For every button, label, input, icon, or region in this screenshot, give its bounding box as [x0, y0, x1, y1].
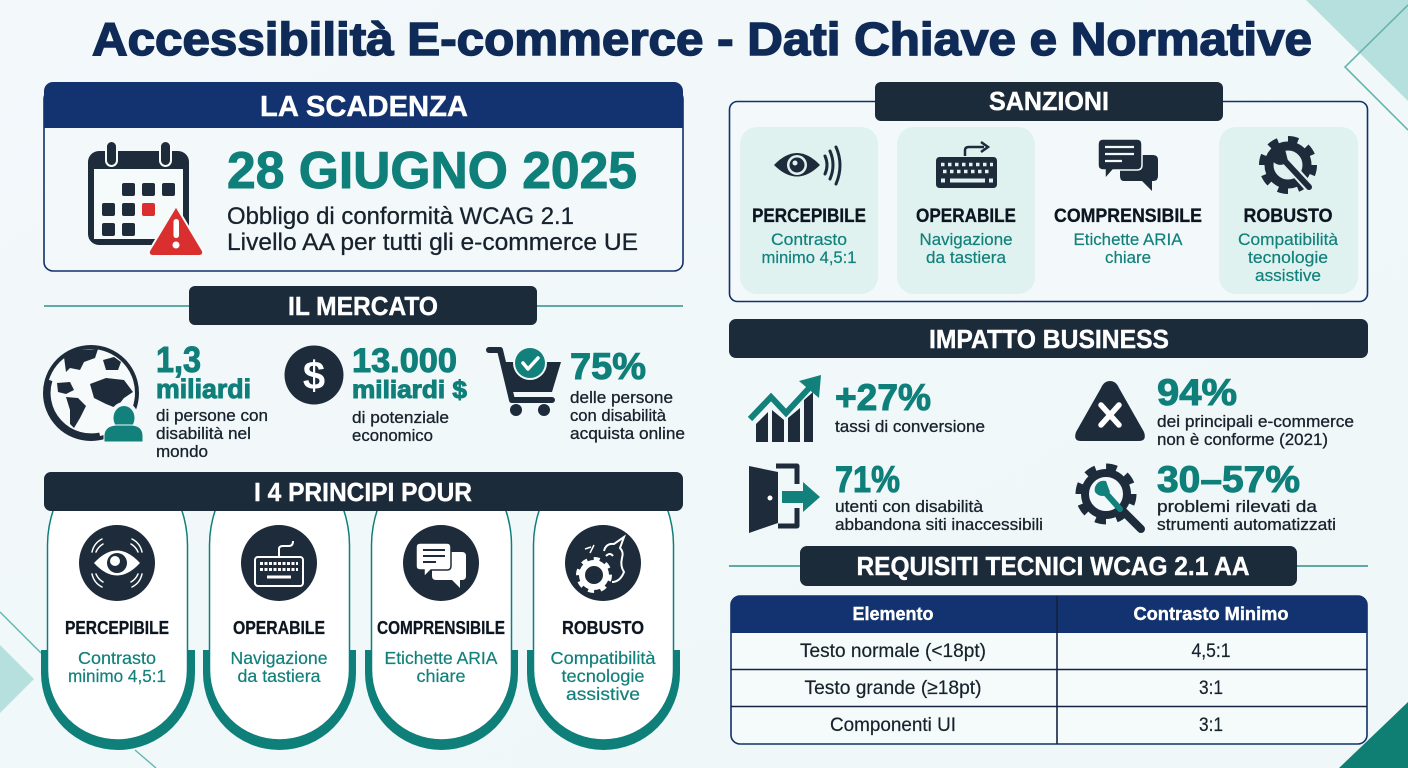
- stat: 13.000 miliardi: [284, 342, 467, 445]
- stat: 1,3 miliardi: [45, 339, 268, 461]
- stat: 75%: con disabilità: [570, 406, 667, 425]
- stat: +27%: +27%: [835, 377, 931, 418]
- stat: 1,3 miliardi: di persone con: [156, 406, 268, 425]
- stat: 13.000 miliardi: miliardi $: [352, 376, 467, 404]
- card: percepibile: minimo 4,5:1: [762, 248, 856, 267]
- stat: 1,3 miliardi: mondo: [156, 442, 208, 461]
- card: robusto: [1219, 127, 1358, 294]
- table row: testo normale: Testo normale (<18pt): [800, 640, 986, 662]
- table row: testo normale: [800, 640, 1230, 662]
- stat: 1,3 miliardi: miliardi: [156, 374, 251, 404]
- table row: testo grande: 3:1: [1199, 677, 1223, 699]
- card: operabile: Navigazione: [230, 648, 328, 668]
- stat: 1,3 miliardi: disabilità nel: [156, 424, 251, 443]
- table header: [731, 596, 1367, 633]
- icon: dollar coin: [284, 346, 344, 404]
- heading: impatto business: [729, 319, 1368, 358]
- card: percepibile: Contrasto: [771, 230, 847, 249]
- table row: componenti ui: [830, 714, 1223, 736]
- icon: warning triangle with x: [1075, 381, 1145, 441]
- heading: requisiti tecnici: [729, 546, 1368, 586]
- stat: 13.000 miliardi: 13.000: [352, 342, 457, 380]
- card: robusto: ROBUSTO: [562, 618, 644, 638]
- table row: testo normale: 4,5:1: [1192, 640, 1230, 662]
- card: robusto: tecnologie: [1248, 248, 1328, 267]
- icon: calendar with warning: [88, 141, 203, 256]
- table row: testo grande: [804, 677, 1223, 699]
- panel: la scadenza: [44, 82, 683, 271]
- heading: il mercato: IL MERCATO: [288, 291, 438, 321]
- text: obligation: [227, 203, 638, 256]
- date: 28 GIUGNO 2025: [227, 142, 637, 200]
- card: percepibile: [41, 505, 195, 750]
- table: contrast requirements: [731, 596, 1367, 744]
- card: operabile: da tastiera: [238, 666, 321, 686]
- stat: 30-57%: 30–57%: [1157, 459, 1300, 500]
- card: percepibile: PERCEPIBILE: [752, 206, 866, 227]
- stat: 75%: 75%: [570, 346, 646, 387]
- card: robusto: Compatibilità: [1238, 230, 1339, 249]
- card: operabile: Navigazione: [920, 230, 1012, 249]
- card: comprensibile: [1054, 139, 1202, 267]
- card: percepibile: PERCEPIBILE: [65, 618, 169, 638]
- text: obligation: Obbligo di conformità WCAG 2.1: [227, 203, 574, 230]
- card: robusto: assistive: [1255, 266, 1321, 285]
- card: comprensibile: COMPRENSIBILE: [1054, 206, 1202, 227]
- table row: componenti ui: Componenti UI: [830, 714, 956, 736]
- card: operabile: da tastiera: [926, 248, 1007, 267]
- icon: eye with waves: [774, 147, 840, 184]
- card: comprensibile: Etichette ARIA: [384, 648, 498, 668]
- stat: 75%: [489, 346, 685, 443]
- card: robusto: [527, 505, 680, 750]
- card: operabile: [203, 505, 356, 750]
- decoration: bottom left shapes: [0, 612, 156, 768]
- table header: Elemento: [852, 604, 934, 624]
- card: comprensibile: COMPRENSIBILE: [377, 618, 505, 638]
- card: comprensibile: Etichette ARIA: [1074, 230, 1183, 249]
- icon: chat bubbles: [403, 525, 479, 601]
- icon: shopping cart: [489, 346, 561, 416]
- stat: 75%: acquista online: [570, 424, 685, 443]
- stat: 71%: abbandona siti inaccessibili: [835, 515, 1043, 534]
- card: robusto: assistive: [566, 684, 640, 704]
- title: Accessibilità E-commerce - Dati Chiave e Normative: [92, 13, 1312, 65]
- heading: la scadenza: [44, 82, 683, 128]
- stat: 30-57%: strumenti automatizzati: [1157, 515, 1336, 534]
- table row: componenti ui: 3:1: [1199, 714, 1223, 736]
- card: robusto: Compatibilità: [550, 648, 656, 668]
- stat: 30-57%: [1080, 459, 1336, 534]
- stat: +27%: tassi di conversione: [835, 417, 985, 436]
- card: operabile: OPERABILE: [916, 206, 1016, 227]
- stat: 13.000 miliardi: economico: [352, 426, 433, 445]
- decoration: bottom right triangle: [1339, 702, 1408, 768]
- heading: i 4 principi pour: [44, 472, 683, 511]
- icon: exit door with arrow: [749, 466, 820, 533]
- table row: testo grande: Testo grande (≥18pt): [804, 677, 982, 699]
- icon: gear with magnifier and wrench: [1080, 468, 1141, 529]
- stat: 71%: 71%: [835, 459, 900, 500]
- stat: +27%: [750, 375, 985, 442]
- card: comprensibile: [365, 505, 518, 750]
- icon: keyboard: [241, 525, 317, 601]
- panel: i 4 principi pour: [41, 472, 683, 750]
- heading: sanzioni: [875, 82, 1223, 121]
- decoration: top right shapes: [1306, 0, 1408, 130]
- icon: gear and head: [565, 525, 641, 601]
- icon: growth chart: [750, 375, 821, 442]
- heading: il mercato: [44, 286, 683, 325]
- card: percepibile: [740, 127, 878, 294]
- stat: 94%: non è conforme (2021): [1157, 430, 1328, 449]
- icon: eye: [79, 525, 155, 601]
- card: robusto: ROBUSTO: [1244, 206, 1332, 227]
- card: operabile: [897, 127, 1035, 294]
- stat: 94%: dei principali e-commerce: [1157, 412, 1354, 431]
- text: obligation: Livello AA per tutti gli e-commerce UE: [227, 229, 638, 256]
- card: robusto: tecnologie: [562, 666, 644, 686]
- stat: 71%: [749, 459, 1043, 534]
- icon: dollar coin: $: [303, 354, 325, 398]
- heading: i 4 principi pour: I 4 PRINCIPI POUR: [254, 477, 472, 507]
- table header: Contrasto Minimo: [1134, 604, 1288, 624]
- card: comprensibile: chiare: [1105, 248, 1151, 267]
- icon: keyboard: [936, 142, 997, 188]
- stat: 13.000 miliardi: di potenziale: [352, 408, 449, 427]
- stat: 30-57%: problemi rilevati da: [1157, 497, 1318, 516]
- card: percepibile: Contrasto: [78, 648, 156, 668]
- stat: 94%: 94%: [1157, 372, 1237, 413]
- stat: 94%: [1075, 372, 1354, 449]
- icon: globe with person: [45, 347, 143, 442]
- stat: 1,3 miliardi: 1,3: [156, 339, 201, 380]
- stat: 71%: utenti con disabilità: [835, 497, 984, 516]
- card: comprensibile: chiare: [416, 666, 466, 686]
- heading: requisiti tecnici: REQUISITI TECNICI WCAG 2.1 AA: [856, 551, 1250, 581]
- heading: impatto business: IMPATTO BUSINESS: [929, 324, 1169, 354]
- card: operabile: OPERABILE: [233, 618, 325, 638]
- heading: la scadenza: LA SCADENZA: [260, 91, 468, 123]
- panel: sanzioni: [730, 82, 1368, 302]
- heading: sanzioni: SANZIONI: [989, 86, 1109, 116]
- icon: chat bubbles: [1098, 139, 1158, 191]
- stat: 75%: delle persone: [570, 388, 673, 407]
- icon: gear with wrench: [1263, 140, 1313, 190]
- card: percepibile: minimo 4,5:1: [68, 666, 166, 686]
